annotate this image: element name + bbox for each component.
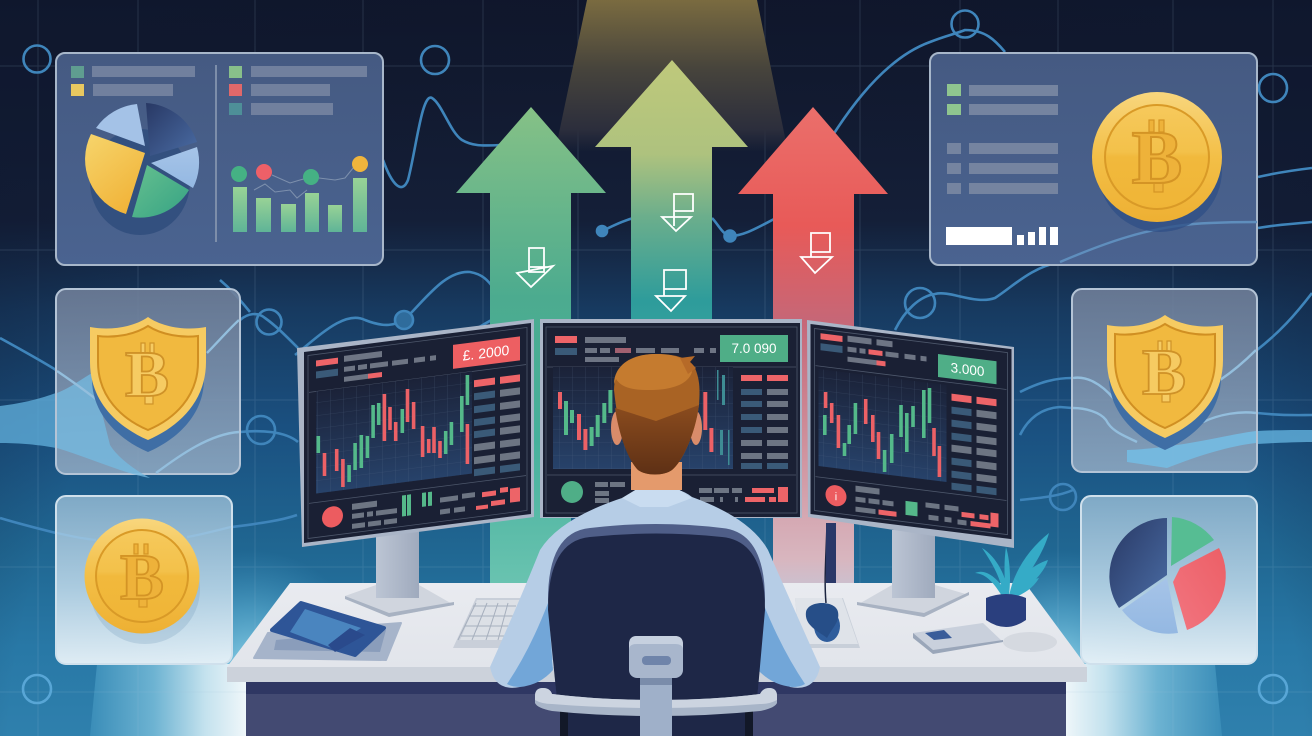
curve crossing panel [1060, 222, 1257, 262]
panel: bitcoin summary [930, 53, 1257, 265]
rising yellow-teal arrow [595, 60, 748, 583]
small down-arrow icons on arrows [517, 194, 832, 311]
ribbon and lines seen through glass [57, 320, 239, 478]
bar chart [231, 156, 368, 232]
icon: bitcoin shield [1107, 315, 1223, 450]
keyboard [453, 598, 520, 648]
tablet on desk [254, 603, 401, 660]
chair stem [640, 675, 672, 736]
pie chart [1109, 517, 1226, 634]
center screen header [555, 336, 716, 362]
right footer [826, 482, 998, 530]
panel: shield left [56, 289, 240, 478]
rising red arrow [738, 107, 888, 583]
light blue ribbon right [1257, 430, 1312, 444]
monitor stands [345, 530, 969, 617]
left price tag: £. 2000 [463, 342, 510, 364]
icon: bitcoin shield: B [1142, 336, 1186, 409]
panel: shield right [1072, 289, 1257, 472]
chair bracket [629, 636, 683, 678]
monitor: left [297, 319, 534, 547]
center order book [741, 375, 788, 469]
panel: pie lower right [1081, 496, 1257, 664]
legend right [229, 66, 367, 115]
notebook and coaster [913, 623, 1057, 654]
icon: bitcoin coin large [1092, 92, 1222, 232]
person [490, 354, 820, 688]
right price tag: 3.000 [951, 360, 984, 379]
center price tag: 7.0 090 [731, 341, 777, 356]
ribbon and lines seen through glass [1073, 350, 1256, 468]
icon: bitcoin coin: B [120, 541, 164, 614]
desk [227, 583, 1087, 736]
legend left [71, 66, 195, 96]
mouse pad and mouse [795, 523, 860, 648]
left price tag [453, 336, 520, 369]
chair back [548, 524, 765, 736]
left screen header [316, 344, 436, 385]
neck and ears [611, 411, 702, 490]
spotlight beam [555, 0, 788, 152]
icon: bitcoin coin [84, 518, 200, 644]
plant [975, 533, 1049, 627]
icon: bitcoin shield: B [125, 338, 169, 411]
monitor: right [807, 320, 1014, 548]
rising green arrow [456, 107, 606, 583]
right footer: i [835, 491, 837, 503]
line seen through glass [57, 527, 231, 540]
hair [614, 354, 700, 474]
pie chart [85, 103, 199, 235]
chair legs [560, 710, 753, 736]
center candlesticks [558, 370, 730, 465]
left candlesticks [316, 375, 469, 487]
left order book [474, 374, 520, 476]
shirt [490, 487, 820, 688]
chair arm rest [535, 688, 777, 716]
left footer [322, 480, 520, 533]
center footer [561, 481, 788, 503]
list rows [947, 84, 1058, 194]
icon: bitcoin coin large: B [1132, 116, 1182, 200]
panel: portfolio dashboard [56, 53, 383, 265]
light blue ribbon left [0, 393, 56, 448]
monitor: center [540, 319, 802, 518]
center price tag [720, 335, 788, 362]
right price tag [938, 354, 996, 384]
white signal bars [946, 227, 1058, 245]
icon: bitcoin shield [90, 317, 206, 452]
office chair [535, 524, 777, 736]
right screen header [820, 332, 926, 372]
panel: coin lower left [56, 496, 232, 664]
right order book [952, 394, 996, 495]
right candlesticks [823, 388, 941, 477]
